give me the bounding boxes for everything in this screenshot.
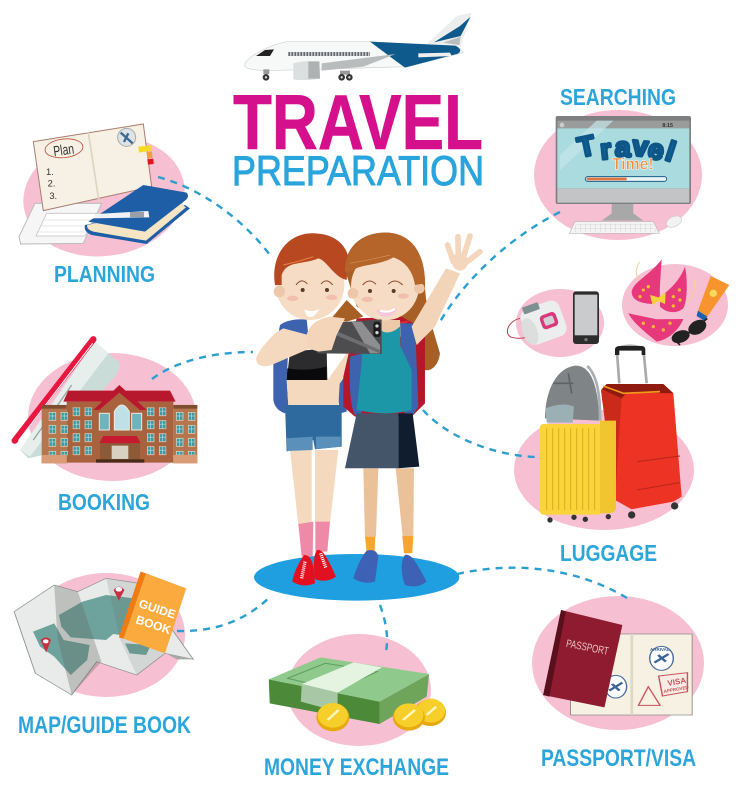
panel: luggage xyxy=(514,346,694,566)
girl on the right xyxy=(343,233,480,587)
icon: instant camera and smartphone xyxy=(507,291,599,347)
icon: notebook, papers and blue book: 2. xyxy=(48,179,55,189)
panel: money exchange xyxy=(264,634,449,781)
arrival stamp text: ARRIVAL xyxy=(650,647,670,652)
panel: camera and phone xyxy=(507,289,604,357)
title xyxy=(232,78,484,194)
panel: searching xyxy=(534,84,702,240)
label: luggage: LUGGAGE xyxy=(560,540,657,566)
label: searching: SEARCHING xyxy=(560,84,676,110)
searching background blob xyxy=(534,110,702,240)
guide book cover text: BOOK xyxy=(134,613,173,637)
panel: booking xyxy=(15,339,197,515)
girl on the left xyxy=(256,233,363,585)
label: money exchange: MONEY EXCHANGE xyxy=(264,754,449,781)
icon: desktop computer: Time! xyxy=(612,154,654,173)
icon: notebook, papers and blue book xyxy=(19,124,190,244)
waving hand xyxy=(448,236,480,271)
icon: desktop computer: Travel xyxy=(575,129,679,167)
icon: suitcases and backpack xyxy=(540,346,682,523)
planning background blob xyxy=(15,125,193,267)
icon: desktop computer: 8:15 xyxy=(662,123,673,129)
panel: map guide book xyxy=(14,572,193,739)
swimwear background blob xyxy=(622,264,728,346)
visa stamp text: VISA xyxy=(667,676,687,688)
platform ellipse xyxy=(254,554,459,601)
panel: swimwear and beach items xyxy=(622,259,729,346)
label: map guide book: MAP/GUIDE BOOK xyxy=(18,712,192,739)
label: planning: PLANNING xyxy=(54,261,155,287)
icon: airplane xyxy=(245,13,472,81)
guide book cover text: GUIDE xyxy=(137,597,178,622)
panel: planning xyxy=(15,124,193,287)
title: TRAVEL xyxy=(233,78,483,166)
camera background blob xyxy=(516,289,604,357)
luggage background blob xyxy=(514,410,694,530)
icon: notebook, papers and blue book: 1. xyxy=(46,167,54,177)
icon: banknotes and coins xyxy=(269,657,446,731)
icon: passport and visa pages xyxy=(543,610,692,715)
visa stamp text xyxy=(663,676,690,694)
smartphone held in hands xyxy=(306,317,382,354)
visa stamp text: APPROVED xyxy=(663,685,690,694)
dashed connector lines xyxy=(152,177,627,656)
passport cover text: PASSPORT xyxy=(565,638,610,658)
title: PREPARATION xyxy=(232,147,484,194)
icon: bikini, sunscreen and sunglasses xyxy=(628,259,729,345)
icon: folded map xyxy=(14,572,193,695)
guide book cover text xyxy=(134,597,178,637)
money background blob xyxy=(287,634,431,746)
icon: desktop computer xyxy=(556,116,691,233)
passport background blob xyxy=(532,596,704,730)
map background blob xyxy=(27,573,185,697)
label: booking: BOOKING xyxy=(58,489,150,515)
icon: notebook, papers and blue book: 3. xyxy=(49,191,57,201)
icon: tickets and hotel xyxy=(15,339,197,463)
main illustration: two travellers taking a selfie xyxy=(254,233,480,601)
icon: notebook, papers and blue book: Plan xyxy=(52,142,75,160)
booking background blob xyxy=(28,353,196,481)
panel: passport visa xyxy=(532,596,704,772)
label: passport visa: PASSPORT/VISA xyxy=(541,745,696,772)
